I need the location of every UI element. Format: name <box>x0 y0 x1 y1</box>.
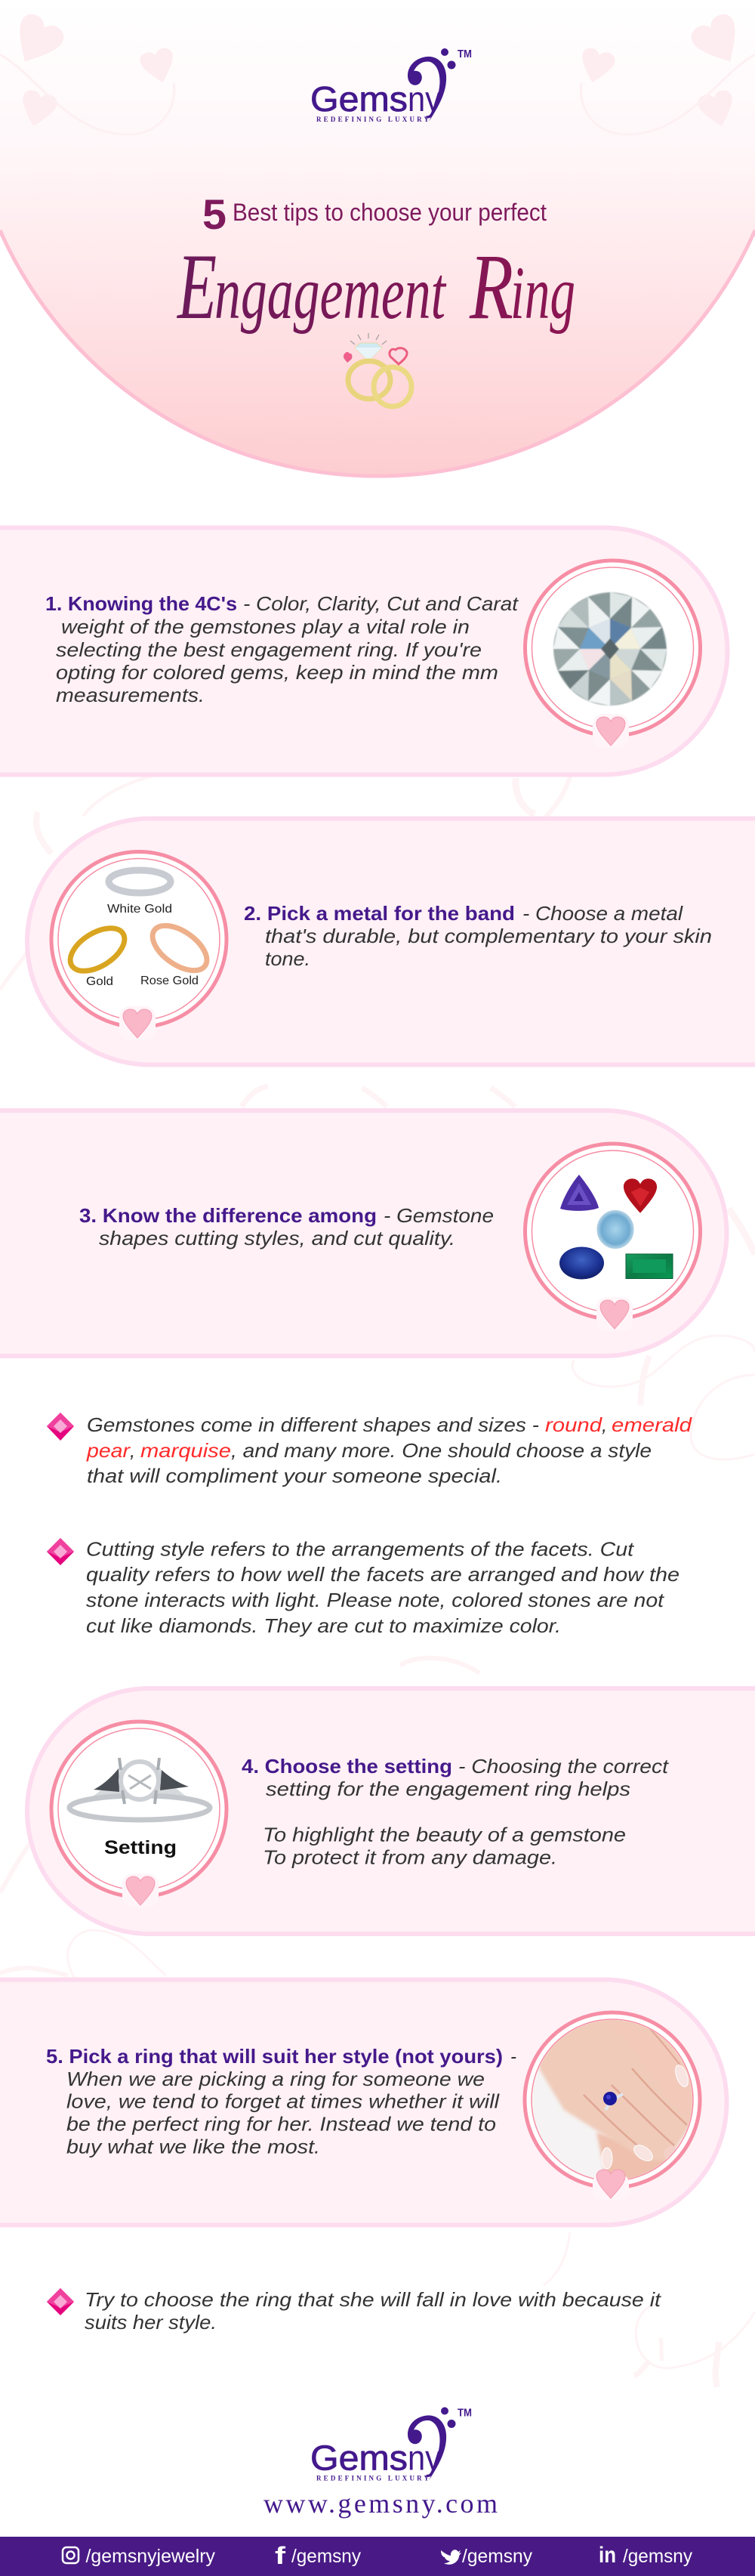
title line: 5 best tips: Best tips to choose your perfect <box>233 199 547 226</box>
text: bullet 1: that will compliment your someone special. <box>87 1464 502 1487</box>
title line: 5 best tips: 5 <box>202 190 226 238</box>
text: tip 3: 3. Know the difference among <box>79 1204 377 1227</box>
text: bullet 1: emerald <box>612 1413 693 1436</box>
text: tip 5: love, we tend to forget at times whether it will <box>66 2090 500 2112</box>
icon: round sapphire <box>559 1246 604 1280</box>
panel 3: gemstone shapes <box>0 1110 726 1356</box>
icon: pink gem bullet 1 <box>47 1413 74 1441</box>
text: tip 4: setting for the engagement ring helps <box>266 1778 630 1800</box>
bullet 2: cutting style <box>47 1538 680 1637</box>
panel 4: choose the setting <box>27 1688 755 1934</box>
icon: wedding rings with diamond and hearts <box>344 333 411 406</box>
text: tip 4 <box>242 1755 670 1869</box>
panel 1: knowing the 4Cs <box>0 527 728 775</box>
logo: Gemsny footer: ny <box>408 2439 441 2478</box>
text: bullet 1: , and many more. One should choose a style <box>231 1439 652 1462</box>
icon: heart ruby <box>624 1178 657 1213</box>
text: bullet 2 <box>86 1538 680 1637</box>
icon: round diamond <box>553 592 667 706</box>
header arc panel <box>0 0 755 476</box>
text: bullet 2: cut like diamonds. They are cut to maximize color. <box>86 1614 561 1637</box>
panel 5: suit her style <box>0 1979 726 2225</box>
title: Engagement Ring: ngagement <box>214 251 447 335</box>
text: tip 2: tone. <box>265 947 310 970</box>
icon: heart 1 <box>596 717 625 746</box>
icon: white gold ring <box>109 870 171 893</box>
footer social bar <box>0 2537 755 2576</box>
icon: heart 5 <box>593 2170 629 2201</box>
text: tip 5: buy what we like the most. <box>66 2135 320 2157</box>
text: tip 5: be the perfect ring for her. Instead we tend to <box>66 2112 496 2135</box>
text: tip 5: When we are picking a ring for someone we <box>66 2068 485 2090</box>
title line: 5 best tips <box>202 190 547 238</box>
text: tip 5 <box>46 2045 516 2157</box>
icon: heart 3 <box>600 1300 629 1329</box>
text: tip 4: 4. Choose the setting <box>242 1755 452 1778</box>
header decoration: hearts right <box>576 10 755 134</box>
icon: instagram <box>63 2547 79 2563</box>
icon: rose gold ring <box>145 916 214 980</box>
panel 2: metal for the band <box>27 819 755 1065</box>
website url: www.gemsny.com <box>263 2488 498 2519</box>
text: tip 2: - Choose a metal <box>522 902 683 925</box>
text: tip 4: To highlight the beauty of a gemstone <box>263 1824 626 1846</box>
handle: instagram: /gemsnyjewelry <box>86 2546 215 2567</box>
handle: facebook: /gemsny <box>291 2546 361 2567</box>
icon: ring setting <box>66 1758 213 1820</box>
logo: Gemsny footer <box>310 2407 472 2482</box>
handle: twitter: /gemsny <box>462 2546 532 2567</box>
text: bullet 1 <box>86 1413 693 1487</box>
logo: Gemsny header: TM <box>458 48 472 60</box>
text: tip 4: To protect it from any damage. <box>263 1846 557 1869</box>
text: tip 1 <box>45 592 519 706</box>
text: bullet 1: , <box>130 1439 135 1462</box>
icon: heart 4 <box>126 1876 155 1905</box>
text: bullet 2: quality refers to how well the facets are arranged and how the <box>86 1563 680 1586</box>
label: gold: Gold <box>86 975 113 988</box>
text: bullet 3 <box>85 2288 662 2334</box>
circle frame 1 <box>525 561 701 748</box>
bullet 1: shapes and sizes <box>47 1413 693 1487</box>
text: tip 1: weight of the gemstones play a vital role in <box>61 615 470 638</box>
logo: Gemsny footer: Gems <box>310 2439 408 2478</box>
text: bullet 1: Gemstones come in different shapes and sizes - <box>87 1413 539 1436</box>
icon: oval aquamarine <box>597 1210 633 1248</box>
logo: Gemsny header: ny <box>408 79 441 119</box>
icon: gold ring <box>63 919 132 980</box>
text: tip 1: selecting the best engagement ring. If you're <box>56 638 482 661</box>
icon: heart 2 <box>123 1009 152 1038</box>
logo: Gemsny footer: TM <box>458 2407 472 2419</box>
title: Engagement Ring: R <box>469 235 513 338</box>
icon: pink gem bullet 3 <box>47 2288 74 2315</box>
logo: Gemsny footer: REDEFINING LUXURY <box>316 2475 429 2482</box>
title: Engagement Ring: E <box>177 235 217 338</box>
bullet 3: try to choose <box>47 2288 662 2334</box>
icon: linkedin: in <box>599 2543 616 2568</box>
label: rose gold: Rose Gold <box>140 974 199 987</box>
text: tip 2: that's durable, but complementary to your skin <box>265 925 712 947</box>
text: tip 3 <box>79 1204 494 1249</box>
text: tip 2: 2. Pick a metal for the band <box>244 902 515 925</box>
text: bullet 1: pear <box>86 1439 131 1462</box>
text: bullet 1: , <box>602 1413 607 1436</box>
text: bullet 3: Try to choose the ring that she will fall in love with because it <box>85 2288 662 2311</box>
text: tip 5: - <box>510 2045 516 2068</box>
icon: twitter <box>441 2550 461 2565</box>
text: bullet 1: round <box>545 1413 603 1436</box>
photo: hand with sapphire ring <box>532 2020 692 2179</box>
icon: facebook: f <box>275 2542 285 2569</box>
label: setting: Setting <box>104 1837 177 1858</box>
header decoration: hearts left <box>0 10 179 134</box>
title: Engagement Ring: ing <box>510 251 575 335</box>
circle frame 3 <box>525 1144 701 1331</box>
background florals <box>0 774 755 2387</box>
circle frame 4 <box>51 1722 226 1907</box>
text: bullet 1: marquise <box>140 1439 231 1462</box>
text: tip 1: opting for colored gems, keep in mind the mm <box>56 661 498 684</box>
text: bullet 2: Cutting style refers to the arrangements of the facets. Cut <box>86 1538 635 1561</box>
text: tip 5: 5. Pick a ring that will suit her style (not yours) <box>46 2045 503 2068</box>
text: tip 1: measurements. <box>56 684 205 706</box>
text: tip 2 <box>244 902 712 970</box>
text: tip 4: - Choosing the correct <box>458 1755 670 1778</box>
circle frame 2 <box>51 852 226 1040</box>
circle frame 5 <box>525 2012 700 2188</box>
text: tip 3: shapes cutting styles, and cut quality. <box>99 1227 455 1249</box>
title: Engagement Ring <box>177 235 575 338</box>
handle: linkedin: /gemsny <box>623 2546 692 2567</box>
icon: pink gem bullet 2 <box>47 1538 74 1565</box>
text: tip 1: 1. Knowing the 4C's <box>45 592 237 615</box>
logo: Gemsny header <box>310 48 472 123</box>
icon: emerald cut <box>626 1254 673 1278</box>
text: tip 1: - Color, Clarity, Cut and Carat <box>243 592 519 615</box>
logo: Gemsny header: REDEFINING LUXURY <box>316 116 429 123</box>
text: bullet 3: suits her style. <box>85 2311 217 2334</box>
icon: trillion tanzanite <box>560 1175 599 1211</box>
label: white gold: White Gold <box>107 903 172 916</box>
logo: Gemsny header: Gems <box>310 79 408 119</box>
text: tip 3: - Gemstone <box>384 1204 494 1227</box>
text: bullet 2: stone interacts with light. Please note, colored stones are not <box>86 1589 665 1611</box>
